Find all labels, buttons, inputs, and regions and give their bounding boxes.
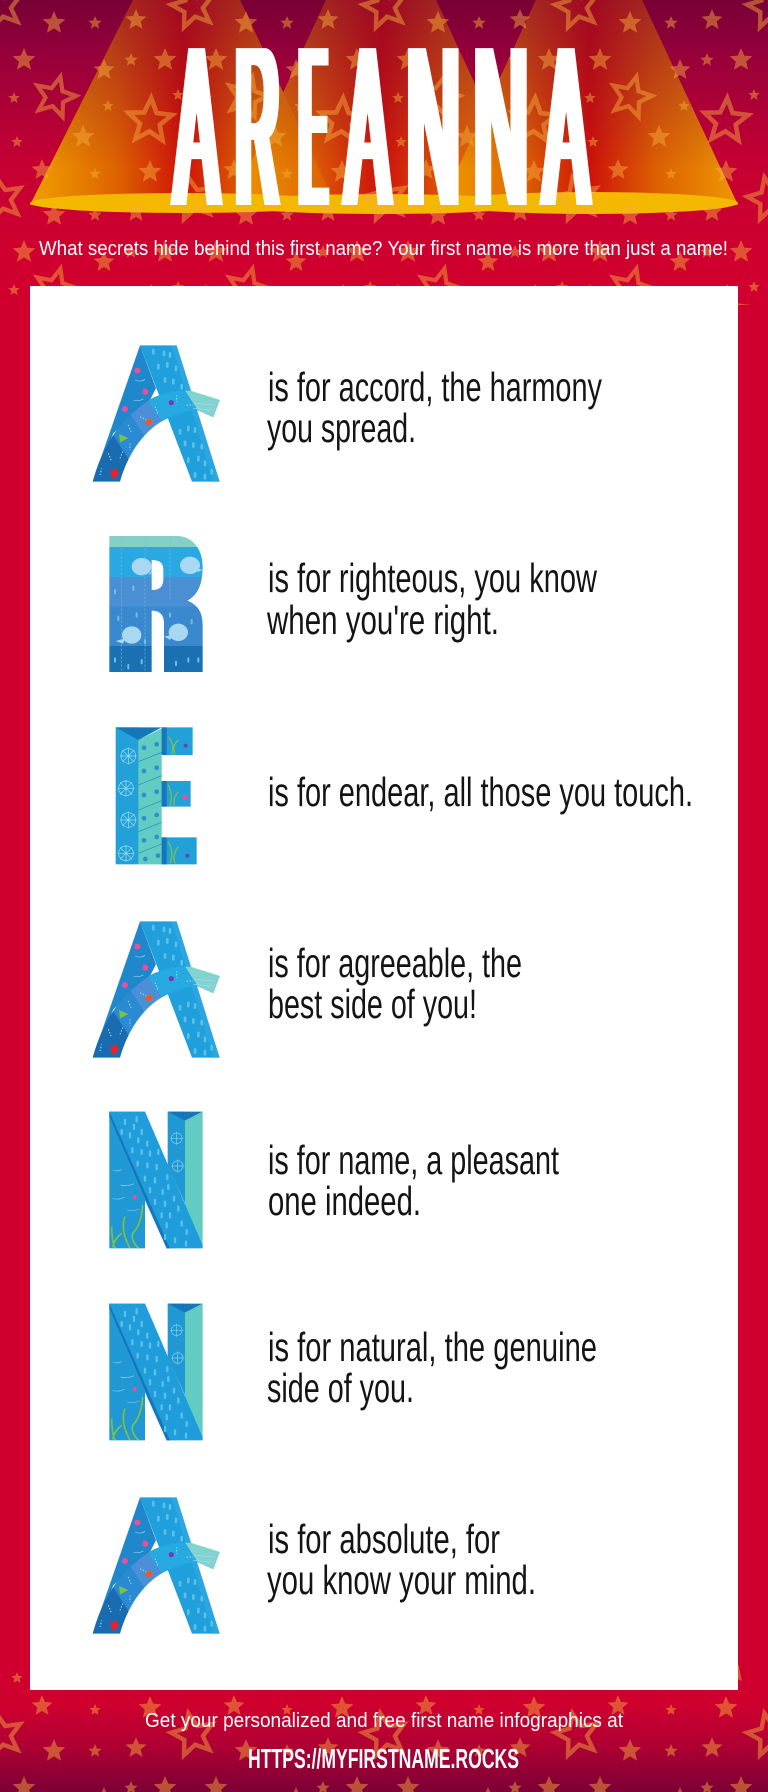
text: A: you know your mind. (267, 1557, 536, 1603)
text: A: you spread. (267, 405, 416, 451)
row 7: A (93, 1497, 536, 1634)
text: N: side of you. (267, 1365, 414, 1411)
title: N (474, 0, 528, 254)
text: R: is for righteous, you know (268, 555, 597, 601)
title: A (175, 0, 218, 254)
spotlights (30, 0, 738, 214)
row 1: A (93, 345, 602, 482)
text: N: is for name, a pleasant (268, 1137, 559, 1183)
text: A: best side of you! (268, 981, 477, 1027)
text: A (267, 1516, 536, 1603)
footer url: HTTPS://MYFIRSTNAME.ROCKS (248, 1743, 519, 1774)
text: A: is for agreeable, the (268, 940, 522, 986)
spotlight: left cone (30, 0, 336, 205)
icon: letter N (109, 1304, 203, 1440)
text: A (267, 364, 602, 451)
title: R (236, 0, 278, 254)
title: E (300, 0, 326, 254)
icon: letter E (116, 727, 197, 864)
subtitle: What secrets hide behind this first name? Your first name is more than just a name! (39, 238, 728, 260)
text: N: one indeed. (268, 1178, 421, 1224)
spotlight pools of light (30, 192, 738, 214)
text: A: is for accord, the harmony (268, 364, 602, 410)
star pattern: bottom (0, 1665, 768, 1792)
icon: letter A (93, 345, 220, 482)
row 6: N (109, 1304, 597, 1440)
row 4: A (93, 921, 522, 1058)
text: N: is for natural, the genuine (268, 1324, 597, 1370)
row 5: N (109, 1112, 559, 1248)
row 2: R (109, 536, 597, 672)
title: N (407, 0, 460, 254)
icon: letter A (93, 921, 220, 1058)
icon: letter R (109, 536, 203, 672)
spotlight top shading (30, 0, 738, 205)
text: N (267, 1324, 597, 1411)
text: A (268, 940, 522, 1027)
spotlight: right cone (441, 0, 738, 205)
footer text: Get your personalized and free first name infographics at (145, 1710, 623, 1732)
icon: letter N (109, 1112, 203, 1248)
text: N (268, 1137, 559, 1224)
text: A (544, 0, 588, 254)
text: A: is for absolute, for (268, 1516, 500, 1562)
icon: letter A (93, 1497, 220, 1634)
row 3: E (116, 727, 693, 864)
star pattern: top (0, 0, 768, 305)
spotlight: middle cone (231, 0, 531, 205)
text: R: when you're right. (266, 597, 499, 643)
panel: white card (30, 286, 738, 1690)
title: A (346, 0, 389, 254)
text: R (266, 555, 597, 643)
